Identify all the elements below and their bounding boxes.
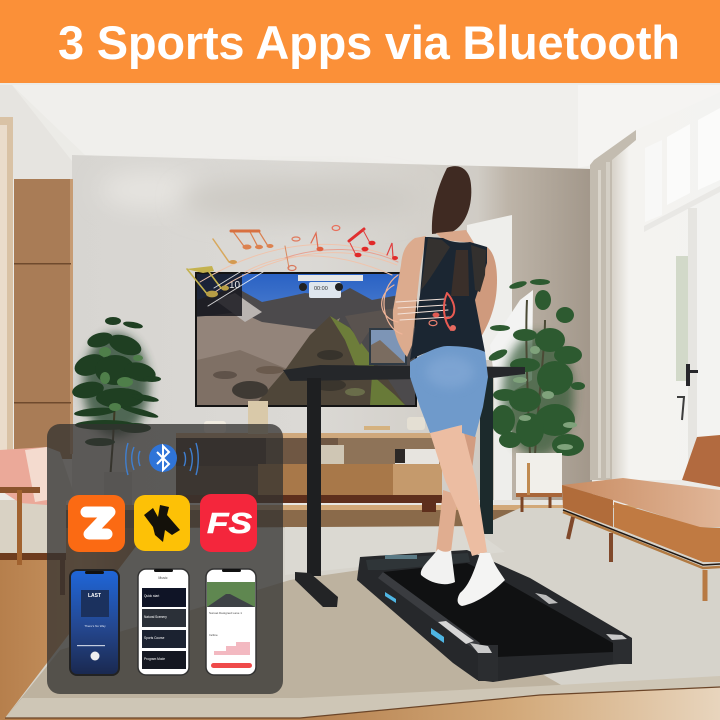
shoes	[421, 549, 455, 584]
woman walking on treadmill	[393, 166, 505, 606]
header banner	[0, 0, 720, 83]
workout cards: Program Mode	[144, 657, 165, 661]
phone: course detail	[206, 569, 256, 675]
icon: Kinomap app	[134, 495, 190, 551]
potted plant left	[71, 317, 161, 505]
phone: workout list	[138, 569, 189, 675]
arms and shoulders	[393, 236, 426, 357]
legs	[436, 490, 458, 552]
workout cards: Sports Course	[144, 636, 165, 640]
treadmill	[357, 550, 632, 682]
title: 3 Sports Apps via Bluetooth	[58, 16, 680, 69]
windows and sheer curtains	[590, 92, 720, 480]
wall-mounted TV with mountain scene	[195, 272, 417, 407]
phone: course detail: Sunset Designed Lane 1	[209, 611, 242, 615]
music notes and staff	[186, 226, 398, 306]
floor and rug	[0, 505, 720, 720]
phone: music player: There's No Way	[84, 624, 106, 628]
icon: FS app	[200, 494, 257, 552]
TV workout overlay: 00:00	[314, 286, 328, 292]
phone: music player: LAST	[88, 593, 101, 599]
app panel overlay	[47, 424, 283, 694]
right plant	[487, 279, 585, 512]
translucent panel	[47, 424, 283, 694]
workout cards: Quick start	[144, 594, 159, 598]
treble clef and staff on woman's back	[382, 275, 456, 334]
phone: course detail: Incline	[209, 633, 218, 637]
icon: bluetooth badge with signal arcs	[126, 443, 198, 475]
workout cards: Natural Scenery	[144, 615, 167, 619]
standing desk	[283, 365, 525, 607]
tank top	[410, 237, 487, 360]
icon: Zwift app	[68, 495, 125, 552]
sofa	[562, 435, 720, 601]
phone: workout list: Music	[158, 576, 168, 580]
left armchair	[0, 447, 75, 595]
hair	[432, 166, 471, 234]
workout cards	[142, 588, 186, 669]
icon: FS app: FS	[207, 508, 253, 540]
shorts	[410, 346, 488, 437]
TV workout overlay: 10	[229, 280, 241, 291]
media console	[176, 401, 442, 512]
TV workout overlay	[229, 275, 363, 298]
phone: music player	[69, 569, 120, 676]
